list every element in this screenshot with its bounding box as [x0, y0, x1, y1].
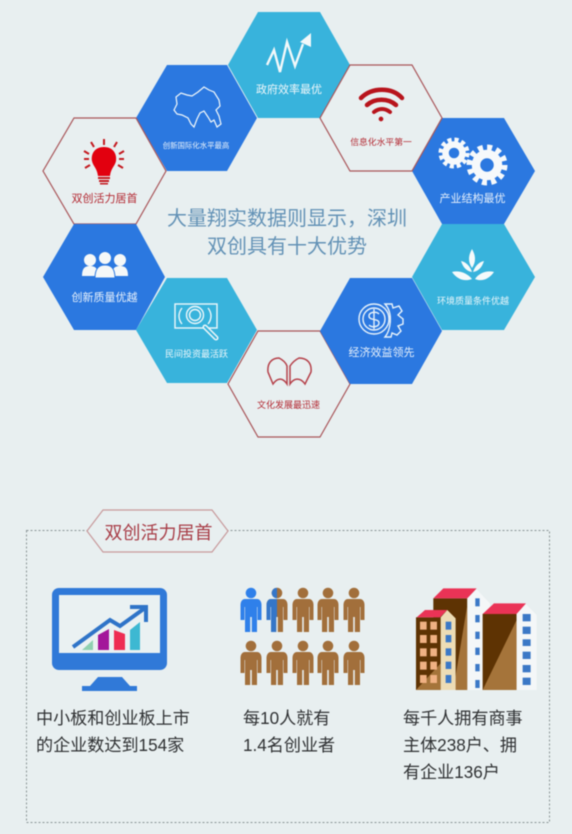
center headline: 双创具有十大优势: [207, 235, 367, 258]
hexagon: private investment: [136, 278, 257, 383]
icon: open book: [268, 358, 311, 384]
label: 信息化水平第一: [350, 136, 412, 147]
text: listed companies: 的企业数达到154家: [36, 736, 184, 755]
icon: coin and gear: [359, 304, 403, 337]
icon: buildings: [416, 588, 537, 690]
section heading badge: [87, 510, 228, 552]
hexagon: informatization: [320, 65, 442, 171]
hexagon: innovation quality: [43, 224, 165, 330]
hexagon: government efficiency: [228, 12, 350, 118]
center headline: [167, 207, 407, 258]
hexagon: industrial structure: [412, 118, 535, 224]
icon: plant leaves: [452, 249, 494, 280]
icon: ten people: [240, 588, 364, 685]
text: entrepreneurs: 每10人就有: [243, 709, 330, 728]
text: entrepreneurs: 1.4名创业者: [243, 736, 335, 755]
icon: map outline: [174, 87, 221, 127]
text: commercial entities: 有企业136户: [403, 763, 500, 782]
icon: three people: [82, 252, 128, 278]
label: 民间投资最活跃: [165, 348, 228, 359]
hexagon: internationalization: [136, 65, 257, 171]
hexagon: economic benefit: [320, 278, 442, 384]
icon: banknote and magnifier: [175, 304, 217, 338]
label: 产业结构最优: [440, 191, 506, 205]
text: entrepreneurs: [243, 709, 335, 755]
text: listed companies: 中小板和创业板上市: [36, 709, 190, 728]
panel: dotted section: [26, 510, 550, 822]
label: 政府效率最优: [256, 82, 322, 96]
icon: rising line: [267, 33, 311, 72]
panel: hexagon ring: [43, 12, 535, 437]
icon: wifi: [361, 90, 402, 121]
hexagon: entrepreneurial vitality: [43, 118, 166, 224]
icon: light bulb: [84, 139, 124, 184]
label: 经济效益领先: [348, 345, 414, 359]
center headline: 大量翔实数据则显示，深圳: [167, 207, 407, 230]
text: commercial entities: 主体238户、拥: [403, 736, 517, 755]
text: listed companies: [36, 709, 190, 755]
section heading badge: 双创活力居首: [104, 523, 212, 543]
label: 双创活力居首: [72, 191, 138, 205]
hexagon: environment: [412, 224, 535, 330]
label: 环境质量条件优越: [437, 295, 509, 306]
label: 文化发展最迅速: [257, 399, 320, 410]
text: commercial entities: [403, 709, 523, 782]
text: commercial entities: 每千人拥有商事: [403, 709, 523, 728]
icon: gears: [441, 140, 504, 182]
label: 创新国际化水平最高: [163, 141, 229, 150]
label: 创新质量优越: [72, 290, 138, 304]
hexagon: culture: [228, 331, 350, 437]
icon: monitor chart: [52, 588, 167, 691]
